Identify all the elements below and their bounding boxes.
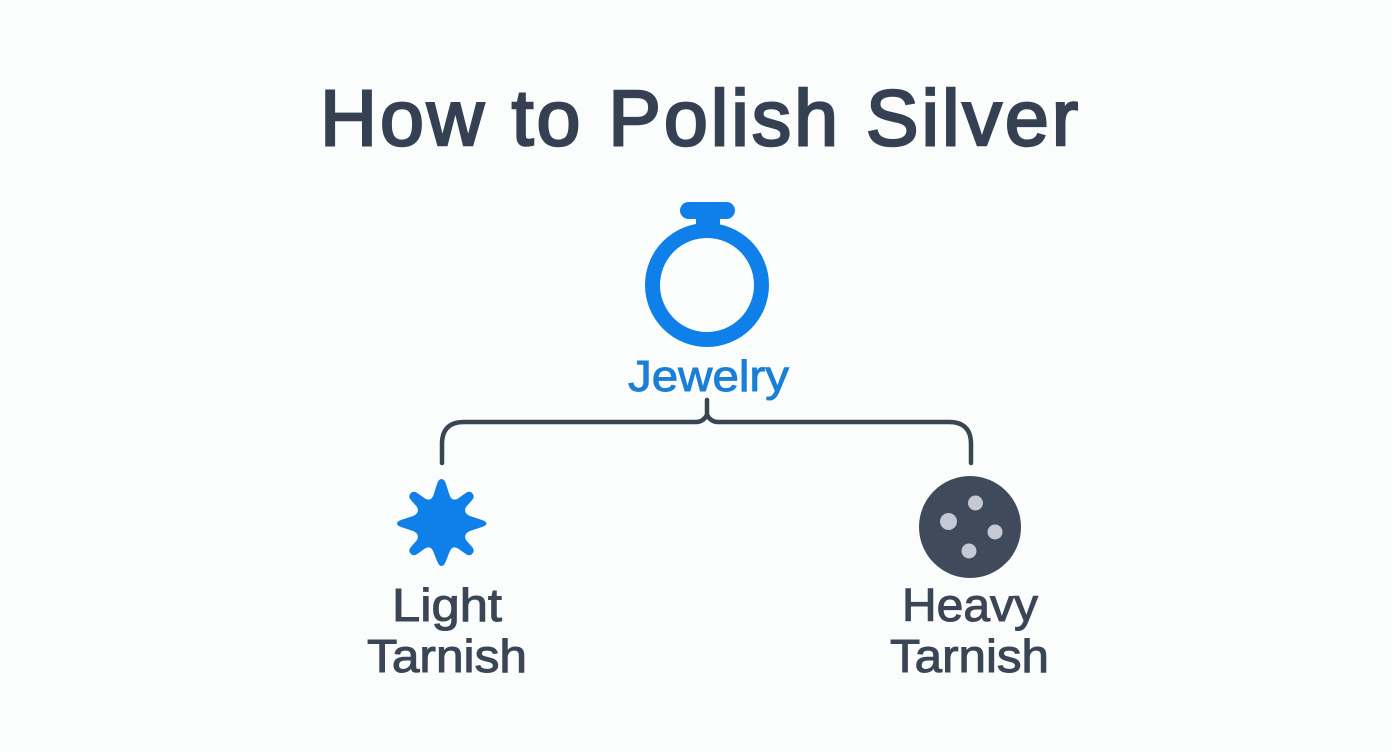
label: Heavy Tarnish: [890, 579, 1049, 682]
label: Heavy Tarnish: Tarnish: [890, 630, 1049, 682]
label: Heavy Tarnish: Heavy: [902, 579, 1038, 631]
icon: heavy tarnish disc: [919, 476, 1021, 578]
label: Light Tarnish: [367, 579, 527, 682]
label: Light Tarnish: Tarnish: [367, 630, 527, 682]
label: Jewelry: Jewelry: [628, 352, 789, 401]
icon: ring: [652, 202, 762, 340]
icon: light tarnish star: [397, 479, 486, 566]
label: Light Tarnish: Light: [392, 579, 502, 631]
bracket connector: [442, 400, 971, 463]
title: How to Polish Silver: [320, 73, 1078, 162]
